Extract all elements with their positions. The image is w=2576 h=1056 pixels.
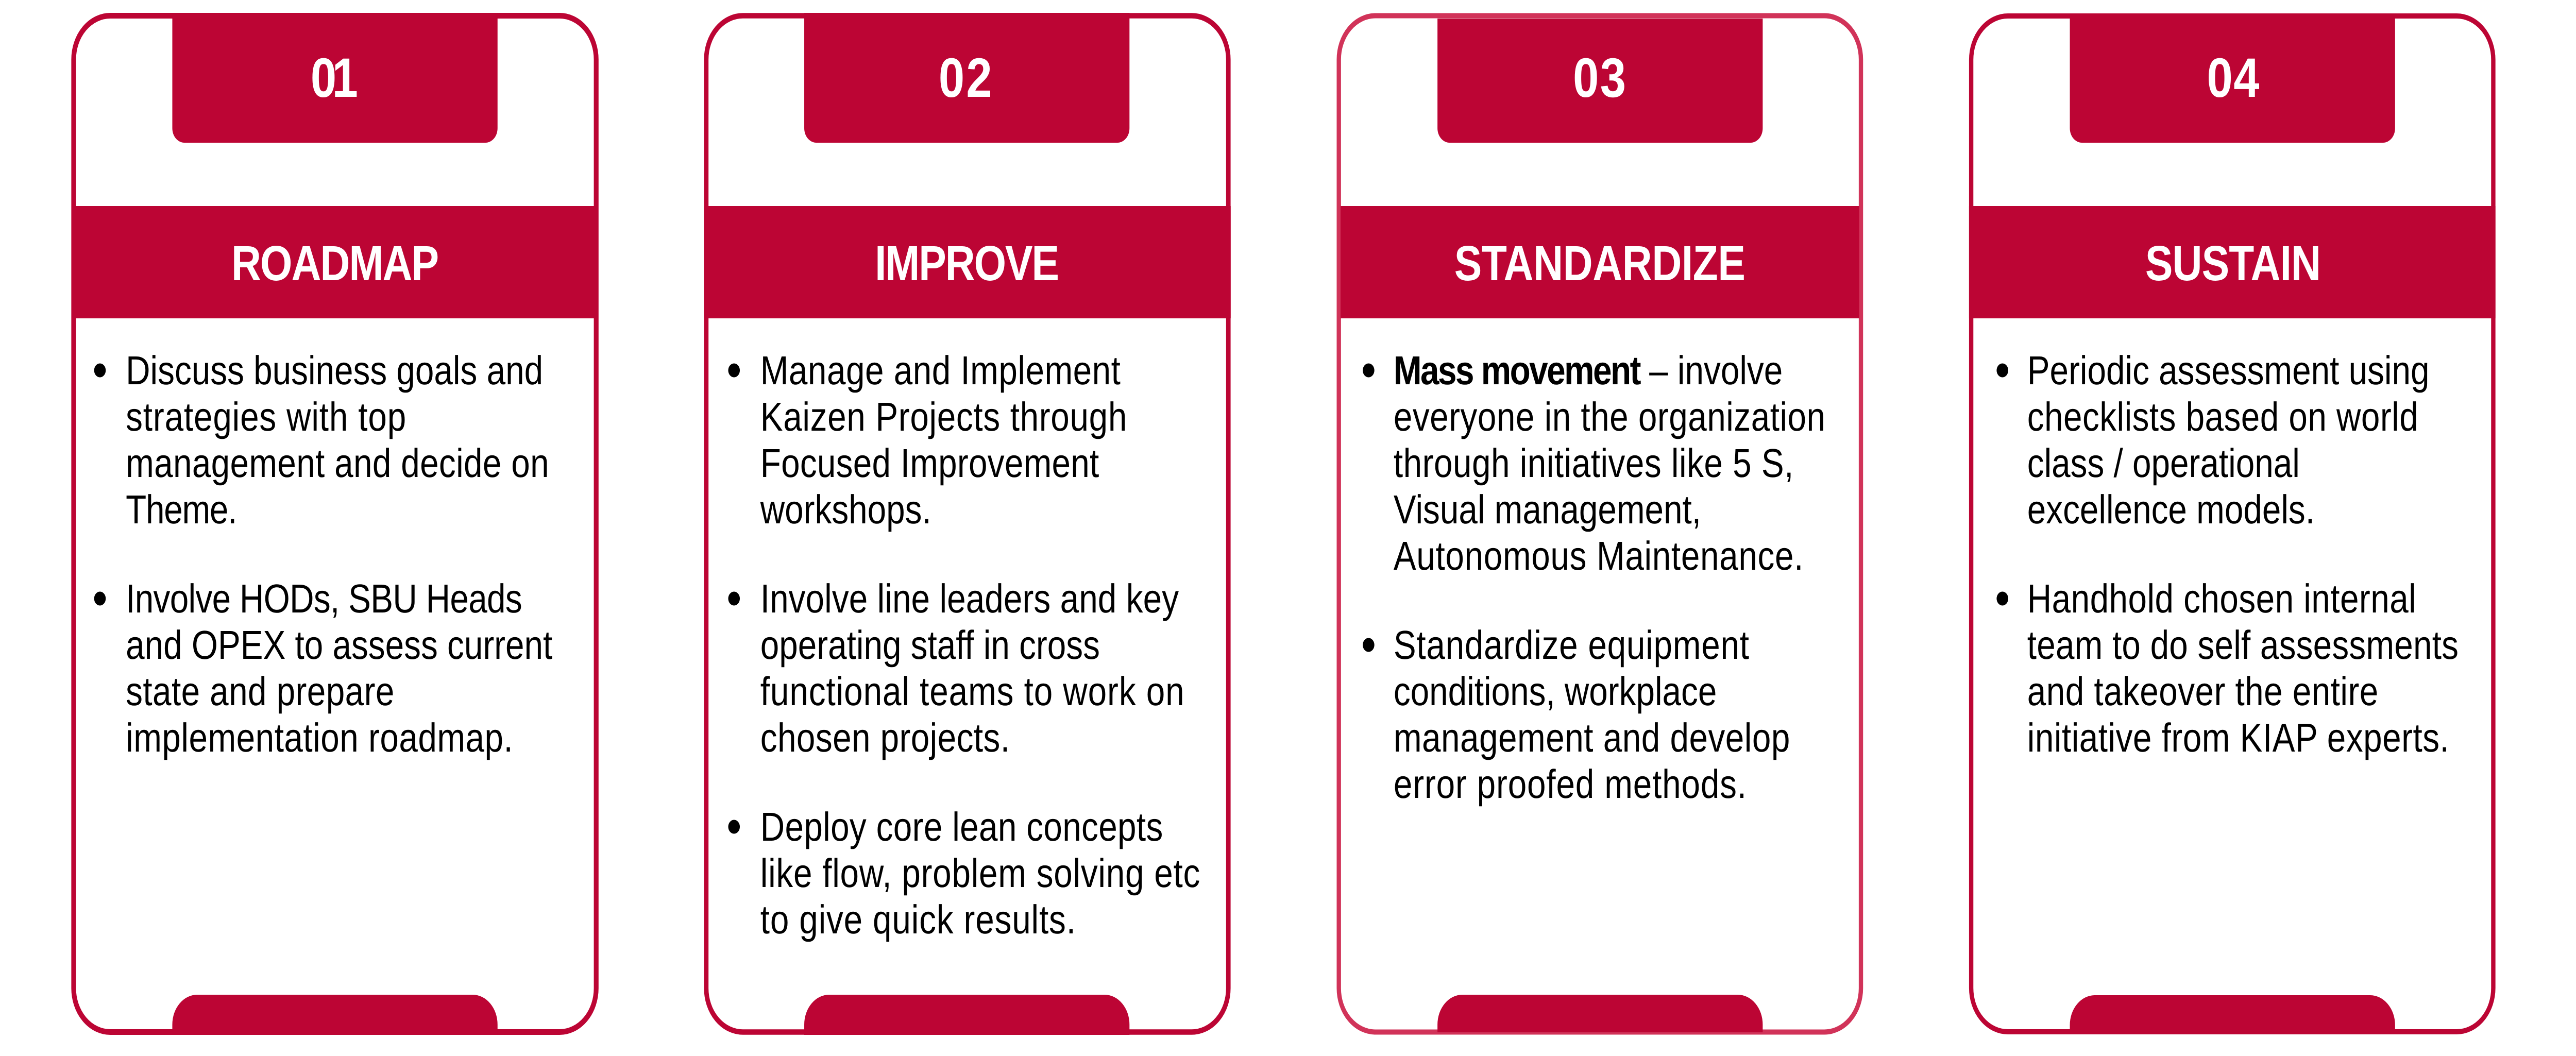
heading: IMPROVE xyxy=(875,236,1059,291)
bullet point: kaizen projects: Manage and Implement xyxy=(760,348,1121,393)
bullet point: handhold internal team: team to do self assessments xyxy=(2027,622,2459,668)
card outline xyxy=(1971,16,2493,1032)
bullet point: standardize equipment xyxy=(1363,622,1790,807)
bullet point: business goals: management and decide on xyxy=(126,440,549,486)
number tab xyxy=(804,13,1129,143)
bullet point: standardize equipment: error proofed methods. xyxy=(1394,761,1747,807)
bullet point: handhold internal team: Handhold chosen internal xyxy=(2027,576,2416,621)
bullet point: assess current state: state and prepare xyxy=(126,669,395,714)
bullet point: kaizen projects: workshops. xyxy=(760,487,931,532)
bullet point: core lean concepts: to give quick results. xyxy=(760,897,1076,942)
card outline xyxy=(74,15,596,1032)
bullet point: assess current state xyxy=(94,576,552,760)
bullet point: periodic assessment: excellence models. xyxy=(2027,487,2315,532)
bullet point: cross functional teams: chosen projects. xyxy=(760,715,1010,760)
bullet point: cross functional teams xyxy=(728,576,1185,760)
number tab xyxy=(1437,19,1762,143)
bullet point: kaizen projects xyxy=(728,348,1127,532)
bullet point: business goals xyxy=(94,348,549,532)
bullet point: mass movement: through initiatives like 5 S, xyxy=(1394,440,1794,486)
bottom tab xyxy=(172,995,498,1035)
bullet point: assess current state: Involve HODs, SBU Heads xyxy=(126,576,522,621)
panel: 03 standardize xyxy=(1339,15,1861,1032)
number: 04 xyxy=(2207,46,2259,109)
bullet point: periodic assessment: class / operational xyxy=(2027,440,2300,486)
bullet point: periodic assessment: checklists based on world xyxy=(2027,394,2418,439)
bullet point: business goals: strategies with top xyxy=(126,394,406,439)
panel: 04 sustain xyxy=(1969,13,2496,1034)
number tab xyxy=(2070,13,2395,143)
bullet point: cross functional teams: operating staff in cross xyxy=(760,622,1100,668)
bullet point: mass movement: Visual management, xyxy=(1394,487,1701,532)
bullet point: core lean concepts: like flow, problem solving etc xyxy=(760,850,1200,896)
bullet point: standardize equipment: conditions, workplace xyxy=(1394,669,1717,714)
bottom tab xyxy=(1437,995,1762,1032)
bullet point: business goals: Discuss business goals and xyxy=(126,348,543,393)
heading: STANDARDIZE xyxy=(1454,236,1745,291)
heading band xyxy=(704,206,1231,318)
card outline xyxy=(1339,15,1861,1032)
number: 03 xyxy=(1573,46,1626,109)
number: 02 xyxy=(939,46,992,109)
bullet point: kaizen projects: Focused Improvement xyxy=(760,440,1099,486)
bullet point: core lean concepts: Deploy core lean concepts xyxy=(760,804,1163,849)
bullet point: mass movement: Mass movement – involve xyxy=(1394,348,1783,393)
bullet point: business goals: Theme. xyxy=(126,487,236,532)
bullet point: mass movement xyxy=(1363,348,1826,578)
panel: 01 roadmap xyxy=(72,13,598,1035)
heading band xyxy=(72,206,598,318)
bullet point: mass movement: everyone in the organization xyxy=(1394,394,1826,439)
bullet point: handhold internal team xyxy=(1996,576,2459,760)
bullet point: standardize equipment: Standardize equipment xyxy=(1394,622,1750,668)
bottom tab xyxy=(2070,995,2395,1034)
bullet point: assess current state: and OPEX to assess current xyxy=(126,622,552,668)
bullet point: cross functional teams: functional teams to work on xyxy=(760,669,1185,714)
heading band xyxy=(1341,206,1859,318)
bottom tab xyxy=(804,995,1129,1035)
heading band xyxy=(1969,206,2496,318)
panel: 02 improve xyxy=(704,13,1231,1035)
card outline xyxy=(706,15,1228,1032)
bullet point: cross functional teams: Involve line leaders and key xyxy=(760,576,1179,621)
bullet point: core lean concepts xyxy=(728,804,1200,942)
bullet point: mass movement: Autonomous Maintenance. xyxy=(1394,533,1804,578)
number: 01 xyxy=(311,46,358,109)
bullet point: assess current state: implementation roadmap. xyxy=(126,715,513,760)
bullet point: periodic assessment: Periodic assessment using xyxy=(2027,348,2429,393)
bullet point: periodic assessment xyxy=(1996,348,2429,532)
bullet point: kaizen projects: Kaizen Projects through xyxy=(760,394,1127,439)
bullet point: handhold internal team: and takeover the entire xyxy=(2027,669,2379,714)
number tab xyxy=(172,13,498,143)
bullet point: standardize equipment: management and develop xyxy=(1394,715,1790,760)
heading: ROADMAP xyxy=(231,236,439,291)
heading: SUSTAIN xyxy=(2145,236,2321,291)
bullet point: handhold internal team: initiative from KIAP experts. xyxy=(2027,715,2449,760)
